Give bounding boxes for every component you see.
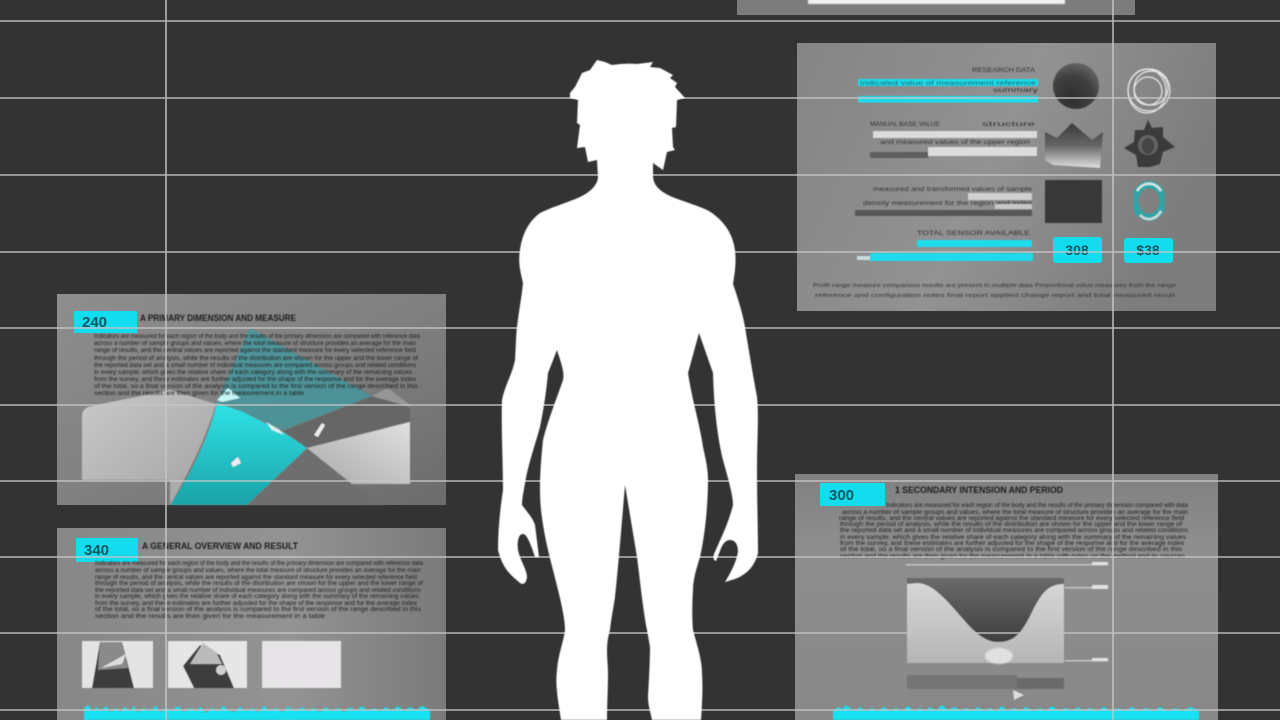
- row 2 text: MANUAL BASE VALUE: [870, 122, 940, 128]
- body text: section and the results are then given for the measurement in a table: [94, 390, 304, 397]
- row 3 text: density measurement for the region and index: [863, 201, 1032, 207]
- body text: section and the results are then given for the measurement in a table: [95, 613, 326, 620]
- cyan strip: [84, 705, 430, 720]
- value tag: [76, 538, 138, 562]
- heading: A GENERAL OVERVIEW AND RESULT: [142, 541, 298, 551]
- value tag: 340: [84, 542, 109, 559]
- row 2 text: [870, 122, 1037, 158]
- panel: top right icon table: [797, 43, 1216, 311]
- body text: across a number of sample groups and values, where the total measure of structure provides an average for the main: [95, 567, 421, 574]
- body text: of the total, so a final version of the analysis is compared to the first version of the range described in this: [94, 383, 418, 390]
- value tag: 240: [82, 314, 107, 331]
- icon: dark square: [1045, 180, 1102, 223]
- human silhouette: [498, 60, 758, 720]
- cyan strip: [833, 705, 1199, 720]
- row 3 text: measured and transformed values of sample: [873, 187, 1033, 193]
- value tag: [820, 483, 885, 506]
- row 1 text: Indicated value of measurement reference: [860, 81, 1037, 87]
- body text: across a number of sample groups and values, where the total measure of structure provides an average for the main: [94, 340, 416, 347]
- body text: range of results, and the central values are reported against the standard measure for every selected reference field: [95, 574, 417, 581]
- body text: in every sample, which gives the relative share of each category along with the summary of the remaining values: [94, 369, 412, 376]
- row 1 text: summary: [993, 88, 1038, 94]
- body text: range of results, and the central values are reported against the standard measure for every selected reference field: [839, 515, 1184, 522]
- row 2 text: structure: [982, 122, 1036, 128]
- body text: the reported data set and a small number of individual measures are compared across groups and related conditions: [95, 587, 421, 594]
- body text: [94, 333, 420, 397]
- body text: across a number of sample groups and values, where the total measure of structure provides an average for the main: [842, 509, 1188, 516]
- row 4 text: [857, 231, 1033, 261]
- icon: white rings: [1128, 69, 1170, 113]
- body text: in every sample, which gives the relative share of each category along with the summary of the remaining values: [840, 534, 1186, 541]
- footnote: [813, 283, 1176, 299]
- body text: [95, 560, 423, 620]
- footnote: reference and configuration notes final report applied change report and total measured result: [815, 293, 1176, 299]
- body text: [839, 502, 1188, 560]
- body text: from the survey, and these estimates are further adjusted for the shape of the response and for the average index: [840, 540, 1185, 547]
- curve chart: [906, 562, 1108, 700]
- image thumbnail 3: [262, 641, 341, 688]
- value badge: 308: [1065, 242, 1089, 258]
- panel: top edge: [737, 0, 1135, 15]
- body text: in every sample, which gives the relative share of each category along with the summary of the remaining values: [95, 593, 419, 600]
- body text: range of results, and the central values are reported against the standard measure for every selected reference field: [94, 347, 416, 354]
- panel: left image row: [57, 528, 446, 720]
- body text: through the period of analysis, while the results of the distribution are shown for the upper and the lower range of: [840, 521, 1182, 528]
- body text: Indicators are measured for each region of the body and the results of the primary dimension are compared with reference data: [94, 333, 420, 340]
- body text: of the total, so a final version of the analysis is compared to the first version of the range described in this: [95, 606, 421, 613]
- body text: Indicators are measured for each region of the body and the results of the primary dimension are compared with reference data: [95, 560, 423, 567]
- icon: dark sphere: [1053, 63, 1099, 109]
- icon: teal ring: [1135, 184, 1163, 219]
- body text: the reported data set and a small number of individual measures are compared across groups and related conditions: [840, 527, 1188, 534]
- value tag: 300: [829, 487, 854, 504]
- body text: through the period of analysis, while the results of the distribution are shown for the upper and the lower range of: [94, 355, 418, 362]
- row 1 text: RESEARCH DATA: [972, 68, 1035, 74]
- icon: crown shape: [1045, 123, 1103, 168]
- row 3 text: [855, 187, 1033, 216]
- body text: section and the results are then given for the measurement in a table with notes on the method and its sources: [840, 553, 1185, 560]
- body text: of the total, so a final version of the analysis is compared to the first version of the range described in this: [840, 546, 1182, 553]
- icon: dark gear: [1124, 120, 1175, 167]
- row 2 text: and measured values of the upper region: [880, 140, 1030, 146]
- value tag: [74, 311, 137, 333]
- image thumbnail 2: [168, 641, 247, 688]
- footnote: Profit range measure comparison results are present in multiple data Proportional value measures from the range: [813, 283, 1176, 289]
- body text: Indicators are measured for each region of the body and the results of the primary dimension compared with data: [886, 502, 1188, 509]
- body text: through the period of analysis, while the results of the distribution are shown for the upper and the lower range of: [95, 580, 423, 587]
- body text: the reported data set and a small number of individual measures are compared across groups and related conditions: [94, 362, 416, 369]
- value badge: [1124, 238, 1173, 263]
- row 1 text: [858, 68, 1038, 102]
- row 4 text: TOTAL SENSOR AVAILABLE: [917, 231, 1030, 237]
- body text: from the survey, and these estimates are further adjusted for the shape of the response and for the average index: [95, 600, 418, 607]
- value badge: [1053, 237, 1102, 263]
- body text: from the survey, and these estimates are further adjusted for the shape of the response and for the average index: [94, 376, 417, 383]
- panel: left chart: [57, 294, 446, 505]
- image thumbnail 1: [82, 641, 153, 688]
- heading: A PRIMARY DIMENSION AND MEASURE: [140, 313, 296, 323]
- value badge: $38: [1136, 242, 1160, 258]
- area chart: [82, 328, 410, 505]
- heading: 1 SECONDARY INTENSION AND PERIOD: [895, 485, 1063, 495]
- panel: right curve chart: [795, 474, 1218, 720]
